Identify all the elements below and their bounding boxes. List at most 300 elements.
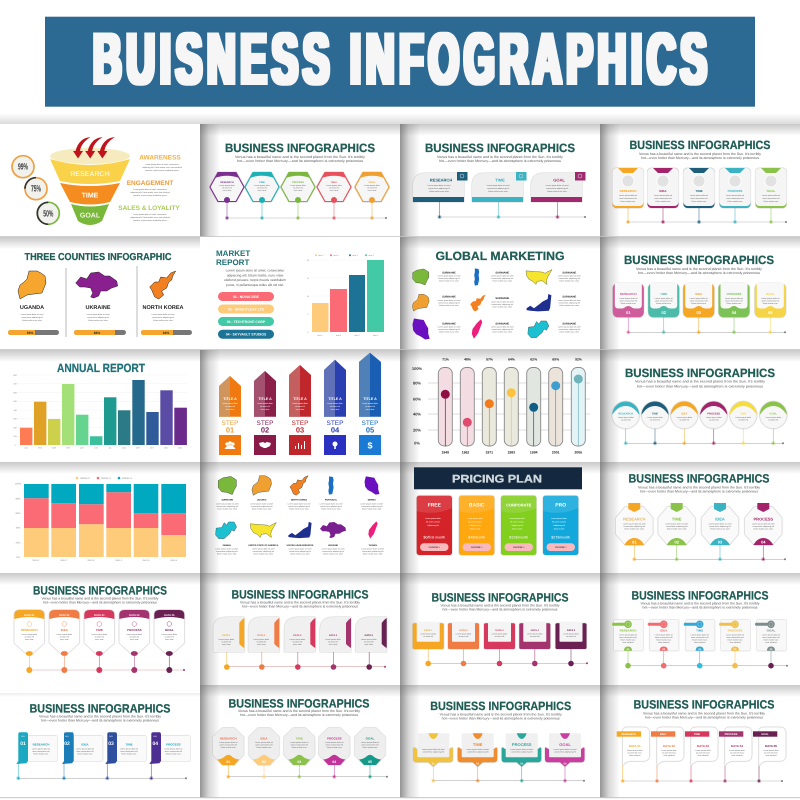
- funnel: TIME: [82, 192, 99, 199]
- paragraph: [224, 268, 286, 287]
- card 05: amet consectetur elit: [361, 744, 379, 746]
- plan: corporate: CHOOSE >: [513, 546, 525, 549]
- card: research: Etiam mattis nunc vitae: [429, 190, 449, 193]
- card: day 04: 04: [153, 741, 158, 747]
- card: research: Etiam mattis nunc: [620, 638, 636, 642]
- intro text: hot—even hotter than Mercury—and its atmosphere is extremely poisonous: [637, 384, 763, 388]
- card: idea: DATA 02: [663, 744, 675, 748]
- map row 3: Lorem ipsum dolor sit amet: [491, 326, 514, 328]
- hexagon: idea: nunc vitae: [330, 189, 338, 192]
- card: time: TIME: [696, 629, 703, 633]
- plan: basic: CHOOSE >: [471, 546, 483, 549]
- card: day 02: amet consectetur elit: [76, 750, 94, 753]
- card: goal: DATA 05: [765, 744, 777, 748]
- card: day 03: DAY: [109, 735, 114, 738]
- intro text: hot—even hotter than Mercury—and its atmosphere is extremely poisonous: [240, 713, 358, 717]
- card: goal: Lorem ipsum dolor sit amet: [554, 748, 577, 751]
- plan: corporate: $129/month: [509, 536, 528, 540]
- card: research: consectetur adipiscing elit: [428, 187, 450, 190]
- map row 3: Lorem ipsum dolor sit amet: [438, 326, 461, 328]
- intro text: [638, 486, 760, 493]
- map: Zambia: [215, 522, 239, 556]
- axis labels: 0%: [414, 440, 420, 446]
- card 02: TIME: [660, 292, 667, 296]
- stacked bars: 100%: [15, 483, 22, 486]
- card 01 research: consectetur adipiscing elit: [623, 525, 646, 528]
- card: idea: Lorem ipsum dolor: [661, 749, 677, 752]
- legend: Series 2: [101, 477, 111, 480]
- bar chart: Item 4: [368, 254, 374, 257]
- intro text: [440, 603, 560, 612]
- card 04: 04: [732, 310, 737, 315]
- card 02: 02: [262, 760, 266, 764]
- label: sales and loyality: Lorem ipsum dolor sit amet, consectetur: [133, 213, 167, 216]
- map row 3: SURINAME: [442, 322, 456, 325]
- map row 3: Etiam mattis nunc vitae: [439, 330, 459, 334]
- circle: goal: GOAL: [770, 412, 777, 416]
- card: time: [472, 172, 526, 219]
- monthly bar chart: MAY: [80, 446, 85, 450]
- card: process: consectetur adipiscing elit: [511, 750, 533, 754]
- map: Zambia: ZAMBIA: [222, 544, 231, 547]
- card: research: [413, 733, 453, 783]
- card: data 3: nunc vitae: [293, 643, 302, 646]
- card: time: TIME: [694, 733, 700, 736]
- card: data 3: [484, 622, 515, 666]
- legend: Series 3: [122, 477, 132, 480]
- card: goal: [545, 733, 584, 783]
- bar chart: [307, 254, 384, 337]
- card: idea: amet consectetur elit: [655, 636, 673, 639]
- card: data 02: nunc vitae: [60, 638, 69, 641]
- hexagon: idea: [317, 172, 351, 220]
- pill 1949: 1949: [442, 450, 449, 454]
- heading: [216, 249, 250, 267]
- intro text: Venus has a beautiful name and is the second planet from the Sun. It's terribly: [440, 712, 562, 716]
- map row 1: Lorem ipsum dolor sit amet: [491, 274, 514, 278]
- card: data 01: RESEARCH: [21, 628, 38, 632]
- card 02: amet consectetur elit: [655, 300, 673, 302]
- intro text: hot—even hotter than Mercury—and its atmosphere is extremely poisonous: [641, 156, 759, 160]
- card 04: [718, 283, 750, 334]
- card: day 01: amet consectetur elit: [32, 750, 50, 753]
- card 03 idea: 03: [718, 539, 723, 544]
- plan: free: Adipiscing elit: [427, 524, 439, 527]
- card: data 3: sit amet elit: [293, 640, 303, 644]
- map: Serbia: [360, 476, 384, 510]
- card: process: PROCESS: [728, 189, 742, 193]
- card 01 research: Etiam mattis nunc vitae: [625, 528, 644, 530]
- hexagon: goal: nunc vitae: [368, 189, 376, 192]
- hexagon: time: [245, 172, 279, 220]
- card: research: [413, 172, 468, 219]
- card: day 02: DAY: [65, 735, 70, 738]
- card: time: amet consectetur elit: [691, 636, 709, 639]
- card: process: vitae eleifend: [729, 641, 741, 644]
- card 04 process: [745, 503, 782, 561]
- arrow step 05: Lorem ipsum dolor: [362, 402, 378, 405]
- heading: BUSINESS INFOGRAPHICS: [432, 591, 568, 605]
- card: data 01: DATA 01: [24, 614, 35, 617]
- card: data 4: Lorem ipsum dolor: [325, 638, 341, 641]
- plan: free: FREE: [428, 502, 442, 508]
- pill 1971: 57%: [486, 358, 493, 362]
- card: process: DATA 04: [731, 744, 743, 748]
- card: goal: GOAL: [767, 629, 775, 633]
- pill 1962: 1962: [462, 450, 469, 454]
- card: goal: [753, 727, 786, 783]
- map: Serbia: consectetur adipiscing elit: [361, 505, 383, 508]
- arrow step 03: sit amet elit: [295, 405, 305, 408]
- map row 3: SURINAME: [495, 322, 509, 325]
- card: data 1: Lorem ipsum dolor: [420, 632, 436, 636]
- card 01: 01: [626, 310, 631, 315]
- map row 1: SURINAME: [562, 271, 576, 274]
- bar chart: Item 2: [333, 254, 339, 257]
- arrow step 02: sit amet elit: [260, 405, 270, 408]
- map row 2: Etiam mattis nunc vitae: [439, 304, 459, 307]
- card: idea: Etiam mattis nunc: [656, 638, 671, 642]
- label: engagement: adipiscing elit. Etiam mattis, nunc vitae eleifend: [130, 191, 170, 194]
- map row 3: consectetur adipiscing elit: [558, 328, 581, 331]
- circle: research: RESEARCH: [618, 412, 633, 416]
- county: Ukraine: Etiam mattis nunc vitae: [88, 319, 108, 322]
- card: goal: Etiam mattis nunc: [763, 638, 779, 642]
- map row 3: Lorem ipsum dolor sit amet: [558, 326, 581, 328]
- map: North Korea: Lorem ipsum dolor sit amet: [288, 502, 311, 506]
- card: goal: GOAL: [767, 189, 775, 193]
- panel: wave hexagon cards: [200, 685, 400, 798]
- card 04 process: PROCESS: [754, 517, 773, 522]
- panel: country maps: [200, 462, 400, 575]
- heading: MARKET: [216, 249, 250, 258]
- arrow step 04: nunc vitae: [331, 408, 339, 411]
- panel: lollipop pill chart: [400, 350, 600, 463]
- intro text: hot—even hotter than Mercury—and its atmosphere is extremely poisonous: [43, 600, 157, 604]
- label: sales and loyality: adipiscing elit. Etiam mattis, nunc vitae eleifend: [130, 216, 170, 219]
- card: data 3: Lorem ipsum dolor: [289, 638, 305, 641]
- map row 3: consectetur adipiscing elit: [491, 328, 514, 331]
- map: Taiwan: TAIWAN: [368, 544, 377, 547]
- card: idea: 02: [662, 648, 666, 651]
- card: idea: sit amet elit nunc: [662, 752, 676, 754]
- card 02 time: Lorem ipsum dolor sit amet: [665, 522, 689, 526]
- panel: data cards timeline: [0, 573, 200, 686]
- card: day 02: IDEA: [81, 743, 89, 747]
- map: North Korea: consectetur adipiscing elit: [288, 505, 310, 508]
- card: time: Lorem ipsum dolor: [695, 749, 711, 752]
- map: Serbia: Etiam mattis nunc vitae: [362, 508, 381, 510]
- card: goal: [755, 620, 786, 668]
- card: data 4: Lorem ipsum dolor: [527, 632, 543, 636]
- panel: annual report: [0, 350, 200, 463]
- card: goal: [531, 172, 586, 219]
- label: awareness: [139, 154, 182, 172]
- map row 2: consectetur adipiscing elit: [491, 303, 514, 306]
- card 04: PROCESS: [727, 292, 741, 296]
- panel: circle timeline: [600, 350, 800, 463]
- card: data 2: nunc vitae: [257, 643, 266, 646]
- card 04: Lorem ipsum dolor sit: [725, 297, 744, 300]
- map: Serbia: SERBIA: [368, 499, 376, 502]
- card: data 2: [248, 617, 279, 670]
- intro text: [639, 152, 761, 160]
- intro text: [437, 155, 563, 163]
- arrow step 03: 03: [296, 426, 304, 435]
- plan: free: [417, 496, 452, 555]
- map: Portugal: consectetur adipiscing elit: [320, 505, 342, 508]
- funnel: RESEARCH: [70, 171, 110, 178]
- map: Taiwan: Etiam mattis nunc vitae: [363, 552, 382, 556]
- card: time: [684, 168, 714, 224]
- card: data 05: Lorem ipsum dolor: [161, 633, 177, 636]
- circle: time: [642, 402, 668, 445]
- card: time: consectetur adipiscing elit: [487, 187, 509, 190]
- label: sales and loyality: [118, 205, 180, 222]
- card 02 time: consectetur adipiscing elit: [666, 525, 688, 528]
- circle: blank: TIME: [740, 412, 747, 416]
- map: Portugal: Etiam mattis nunc vitae: [321, 508, 341, 510]
- card: process: Lorem ipsum dolor sit: [726, 634, 745, 636]
- monthly bar chart: 800: [13, 374, 17, 377]
- pill 1949: 71%: [442, 358, 449, 362]
- card: data 1: [213, 617, 244, 670]
- hexagon: idea: IDEA: [331, 181, 337, 184]
- card: research: RESEARCH: [620, 189, 636, 193]
- card 01: Etiam mattis nunc: [621, 302, 636, 305]
- map: UAE: [287, 522, 314, 556]
- legend: [76, 477, 132, 480]
- monthly bar chart: 500: [13, 400, 17, 403]
- card: process: [719, 727, 752, 783]
- card 03: Etiam mattis nunc: [691, 302, 706, 305]
- heading: BUSINESS INFOGRAPHICS: [232, 587, 368, 601]
- card 02 time: 02: [674, 539, 680, 544]
- stacked bars: 0%: [16, 556, 21, 559]
- card: process: [720, 168, 750, 224]
- arrow step 04: STEP: [327, 420, 343, 427]
- intro text: [238, 709, 360, 717]
- card: time: vitae eleifend: [697, 754, 709, 757]
- hexagon: time: sit amet elit: [257, 186, 267, 190]
- card: data 01: sit amet elit: [25, 636, 35, 638]
- card 04 process: consectetur adipiscing elit: [752, 525, 775, 528]
- card: research: RESEARCH: [621, 733, 636, 736]
- map row 2: [412, 294, 581, 311]
- card: day 04: DAY: [153, 735, 158, 738]
- card 04 process: Etiam mattis nunc vitae: [754, 528, 773, 530]
- map: Portugal: PORTUGAL: [325, 499, 338, 502]
- intro text: hot—even hotter than Mercury—and its atmosphere is extremely poisonous: [640, 489, 758, 493]
- map: UAE: UNITED ARAB EMIRATES: [287, 544, 314, 547]
- progress ring 75%: [25, 178, 47, 200]
- card: goal: consectetur adipiscing elit: [554, 750, 576, 754]
- map: Portugal: [320, 476, 343, 510]
- bar chart: 10: [307, 295, 309, 298]
- card: day 03: 03: [108, 741, 114, 747]
- intro text: hot—even hotter than Mercury—and its atmosphere is extremely poisonous: [242, 604, 358, 608]
- pill 1994: 1994: [530, 450, 538, 454]
- heading: BUSINESS INFOGRAPHICS: [630, 138, 770, 152]
- pill 1949: [438, 358, 452, 454]
- card 01: 01: [226, 760, 230, 764]
- bar chart: Item 2: [336, 334, 341, 337]
- stacked bars: 20%: [16, 541, 21, 544]
- circle: process: [700, 402, 727, 445]
- label: engagement: [127, 180, 173, 197]
- card 05: [354, 728, 386, 779]
- card: data 04: PROCESS: [127, 628, 142, 632]
- card: day 01: Etiam mattis nunc: [33, 752, 49, 756]
- card: process: 04: [734, 648, 737, 651]
- card: process: Lorem ipsum dolor sit: [726, 194, 745, 197]
- card 01: RESEARCH: [620, 292, 637, 296]
- monthly bar chart: JUN: [94, 446, 98, 450]
- hexagon: process: nunc vitae: [294, 189, 302, 192]
- county: Uganda: Etiam mattis nunc vitae: [22, 319, 42, 322]
- pill 1971: [482, 358, 496, 454]
- card: time: [685, 727, 718, 783]
- hexagon: research: Lorem ipsum dolor: [219, 184, 235, 187]
- card: goal: GOAL: [553, 178, 565, 183]
- monthly bar chart: SEP: [136, 446, 141, 450]
- card 02: IDEA: [260, 736, 268, 740]
- pill 1971: 1971: [486, 450, 493, 454]
- intro text: Venus has a beautiful name and is the second planet from the Sun. It's terribly: [635, 380, 765, 384]
- hexagon: time: Lorem ipsum dolor: [254, 184, 270, 187]
- arrow step 01: sit amet elit: [225, 405, 235, 408]
- circle: idea: sit amet elit: [680, 418, 690, 422]
- card: goal: Lorem ipsum dolor sit: [762, 194, 781, 197]
- card: data 04: sit amet elit: [130, 636, 140, 638]
- map row 3: Etiam mattis nunc vitae: [493, 330, 512, 334]
- bar chart: 0: [307, 331, 309, 334]
- card: research: amet consectetur elit: [619, 197, 637, 200]
- map: Ukraine: Etiam mattis nunc vitae: [323, 552, 343, 556]
- card: research: sit amet elit nunc: [628, 752, 642, 754]
- card: research: 01: [627, 648, 630, 651]
- monthly bar chart: 100: [13, 435, 17, 438]
- county: North Korea: consectetur adipiscing elit: [152, 316, 174, 319]
- card 01 research: [616, 503, 653, 561]
- intro text: Venus has a beautiful name and is the second planet from the Sun. It's terribly: [639, 152, 761, 156]
- map: USA: UNITED STATE OF AMERICA: [248, 544, 279, 547]
- pill 2006: 2006: [575, 450, 582, 454]
- monthly bar chart: DEC: [178, 446, 183, 450]
- hexagon: process: [281, 172, 315, 220]
- pill 1962: 48%: [464, 358, 471, 362]
- card: data 05: sit amet elit: [165, 636, 175, 638]
- paragraph: eleifend posuere, turpis mauris vestibulum: [224, 278, 286, 282]
- panel: hexagon timeline: [200, 124, 400, 237]
- pill 2001: 2001: [552, 450, 560, 454]
- card: research: Lorem ipsum dolor: [627, 749, 643, 752]
- card: data 01: [14, 610, 44, 673]
- card: data 3: DATA 3: [293, 634, 302, 637]
- card: process: Etiam mattis nunc: [727, 638, 743, 642]
- intro text: [635, 380, 765, 388]
- intro text: Venus has a beautiful name and is the second planet from the Sun. It's terribly: [636, 267, 762, 271]
- pill 1983: 1983: [508, 450, 515, 454]
- card: process: 03: [520, 762, 524, 766]
- card: day 01: Lorem ipsum dolor sit: [32, 748, 51, 750]
- map: Uganda: consectetur adipiscing elit: [251, 505, 273, 508]
- card: day 04: Etiam mattis nunc: [166, 752, 181, 756]
- card 01: Lorem ipsum dolor sit: [219, 741, 238, 744]
- paragraph: purus, in pellentesque tellus elit vel nisl.: [226, 283, 284, 287]
- card: data 03: Lorem ipsum dolor: [91, 633, 107, 636]
- card: data 4: nunc vitae: [329, 643, 337, 646]
- panel: day band cards: [0, 685, 200, 798]
- card: data 05: DATA 05: [164, 614, 175, 617]
- arrow step 05: sit amet elit: [365, 405, 375, 408]
- pill 1983: 64%: [508, 358, 515, 362]
- card: time: Etiam mattis nunc vitae: [488, 190, 508, 193]
- stacked bars: Item 1: [33, 559, 40, 562]
- card: research: [612, 620, 643, 668]
- hexagon: idea: sit amet elit: [329, 186, 339, 190]
- card: idea: vitae eleifend: [658, 641, 669, 644]
- panel: pricing plan: [400, 462, 600, 575]
- card: day 02: Etiam mattis nunc: [77, 752, 93, 756]
- axis labels: 100%: [412, 366, 423, 371]
- map row 1: Etiam mattis nunc vitae: [439, 280, 459, 282]
- axis labels: 40%: [413, 412, 421, 416]
- card: research: vitae eleifend: [629, 754, 640, 757]
- map row 1: Etiam mattis nunc vitae: [560, 280, 579, 282]
- card 04: amet consectetur elit: [725, 300, 743, 302]
- card: goal: amet consectetur elit: [762, 197, 780, 200]
- card: idea: [651, 727, 684, 783]
- monthly bar chart: FEB: [38, 446, 43, 450]
- card: research: RESEARCH: [430, 178, 452, 183]
- card 03 idea: Etiam mattis nunc vitae: [710, 528, 730, 530]
- map row 2: Lorem ipsum dolor sit amet: [491, 300, 514, 304]
- card 05: Lorem ipsum dolor sit: [361, 741, 380, 744]
- card: data 2: Lorem ipsum dolor: [253, 638, 269, 641]
- card 03: amet consectetur elit: [291, 744, 308, 746]
- monthly bar chart: APR: [66, 446, 71, 450]
- card: process: PROCESS: [512, 742, 532, 747]
- card: data 02: Lorem ipsum dolor: [56, 633, 72, 636]
- card: data 5: [356, 617, 387, 670]
- card: idea: amet consectetur elit: [654, 197, 672, 200]
- map: North Korea: Etiam mattis nunc vitae: [289, 508, 309, 510]
- arrow step 03: TITLE A: [293, 397, 307, 401]
- hexagon: research: [210, 172, 244, 220]
- map: Zambia: consectetur adipiscing elit: [216, 550, 238, 553]
- card: process: amet consectetur elit: [726, 197, 744, 200]
- map row 2: SURINAME: [495, 297, 509, 300]
- stacked bars: 60%: [16, 512, 21, 515]
- pill 2001: [549, 358, 563, 454]
- card: process: vitae eleifend: [731, 754, 743, 757]
- card: goal: vitae eleifend: [765, 641, 777, 644]
- card 02: Etiam mattis nunc: [656, 302, 671, 305]
- monthly bar chart: 300: [13, 418, 17, 421]
- county: Ukraine: UKRAINE: [85, 305, 111, 311]
- heading: BUSINESS INFOGRAPHICS: [430, 699, 571, 713]
- map row 1: SURINAME: [495, 271, 509, 274]
- circle: idea: [671, 402, 698, 445]
- monthly bar chart: OCT: [150, 446, 155, 450]
- arrow step 02: Lorem ipsum dolor: [257, 402, 273, 405]
- card: day 04: [149, 732, 190, 780]
- plan: basic: Sit amet consect: [468, 520, 482, 524]
- card 04: Etiam mattis nunc: [726, 302, 742, 305]
- card: time: Lorem ipsum dolor sit amet: [466, 748, 490, 751]
- card: data 05: GOAL: [165, 628, 174, 632]
